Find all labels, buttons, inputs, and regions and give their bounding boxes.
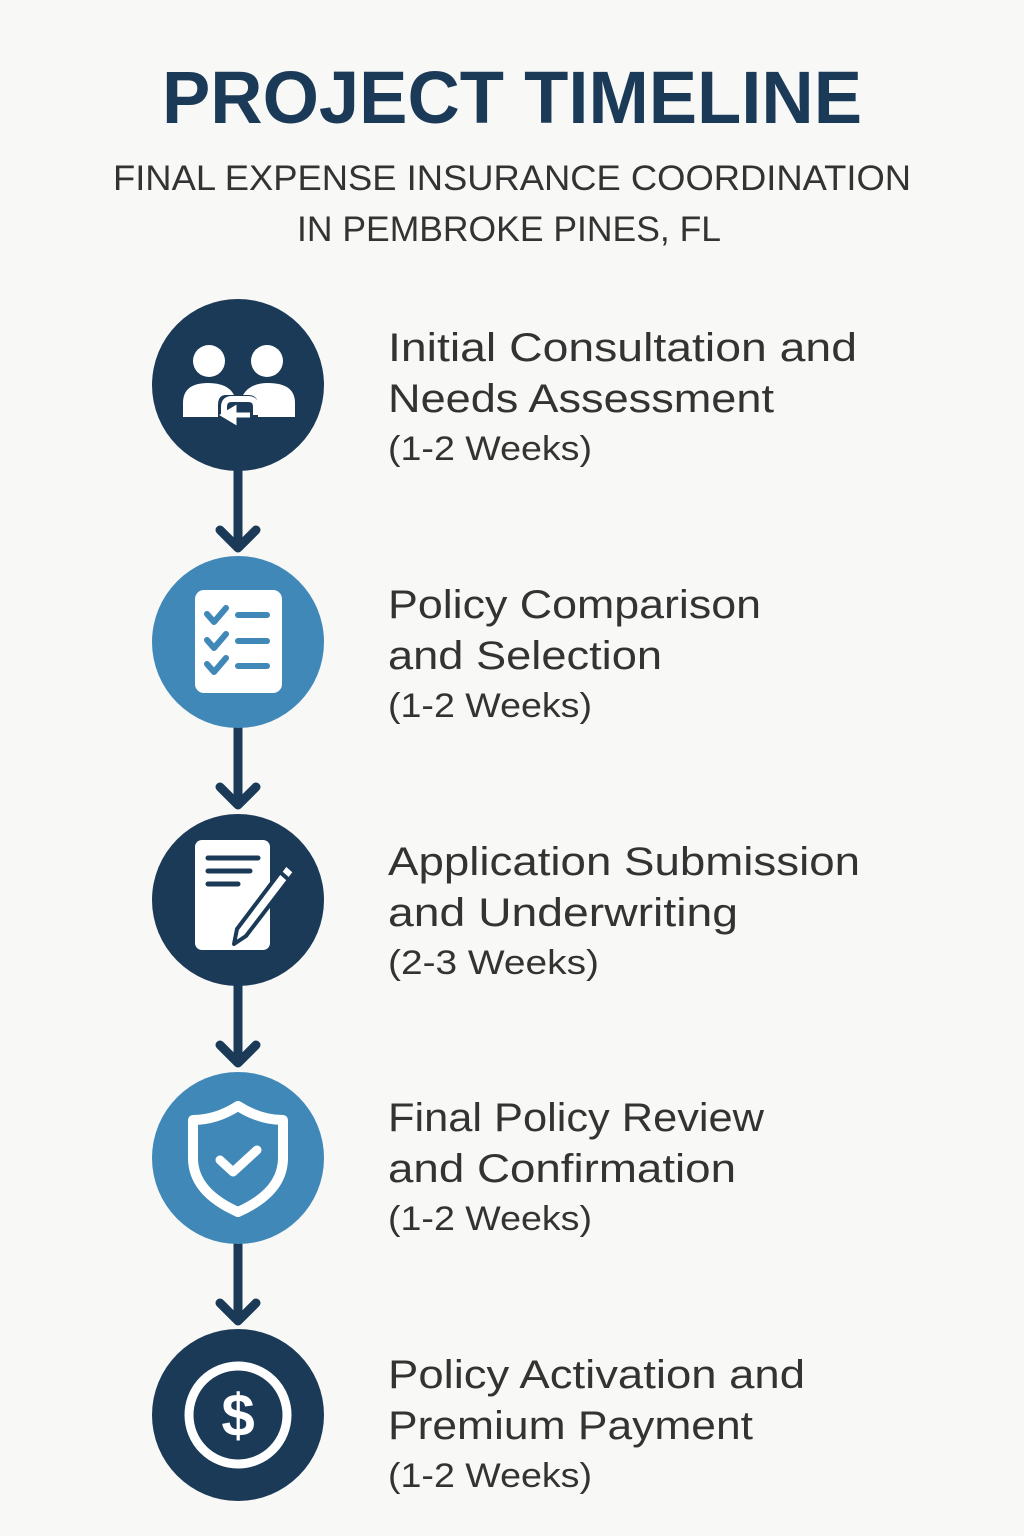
- step 4 text: (1-2 Weeks): [388, 1200, 592, 1238]
- step 2 text: [388, 583, 761, 725]
- arrows: [220, 470, 256, 1321]
- step 3 icon: application: [152, 814, 324, 986]
- step 5 text: (1-2 Weeks): [388, 1457, 592, 1495]
- step 4 text: Final Policy Review: [388, 1096, 764, 1140]
- step 2 icon: checklist: [152, 556, 324, 728]
- step 1 text: (1-2 Weeks): [388, 430, 592, 468]
- step 1 text: Initial Consultation and: [388, 326, 857, 370]
- step 5 icon: dollar: [152, 1329, 324, 1501]
- step 4 text: [388, 1096, 764, 1238]
- step 4 text: and Confirmation: [388, 1147, 736, 1191]
- subtitle: IN PEMBROKE PINES, FL: [297, 210, 721, 249]
- subtitle: [113, 159, 911, 249]
- step 5 text: Policy Activation and: [388, 1353, 805, 1397]
- step 4 icon: shield: [152, 1072, 324, 1244]
- step 1 text: Needs Assessment: [388, 377, 774, 421]
- step 3 text: (2-3 Weeks): [388, 944, 599, 982]
- step 3 text: and Underwriting: [388, 891, 738, 935]
- step 3 text: Application Submission: [388, 840, 860, 884]
- step 3 text: [388, 840, 860, 982]
- step 5 text: Premium Payment: [388, 1404, 753, 1448]
- step 1 text: [388, 326, 857, 468]
- subtitle: FINAL EXPENSE INSURANCE COORDINATION: [113, 159, 911, 198]
- step 2 text: and Selection: [388, 634, 662, 678]
- step 5 icon: dollar: $: [221, 1382, 255, 1449]
- step 2 text: (1-2 Weeks): [388, 687, 592, 725]
- step 5 text: [388, 1353, 805, 1495]
- step 2 text: Policy Comparison: [388, 583, 761, 627]
- step 1 icon: consultation: [152, 299, 324, 471]
- title: PROJECT TIMELINE: [162, 56, 862, 139]
